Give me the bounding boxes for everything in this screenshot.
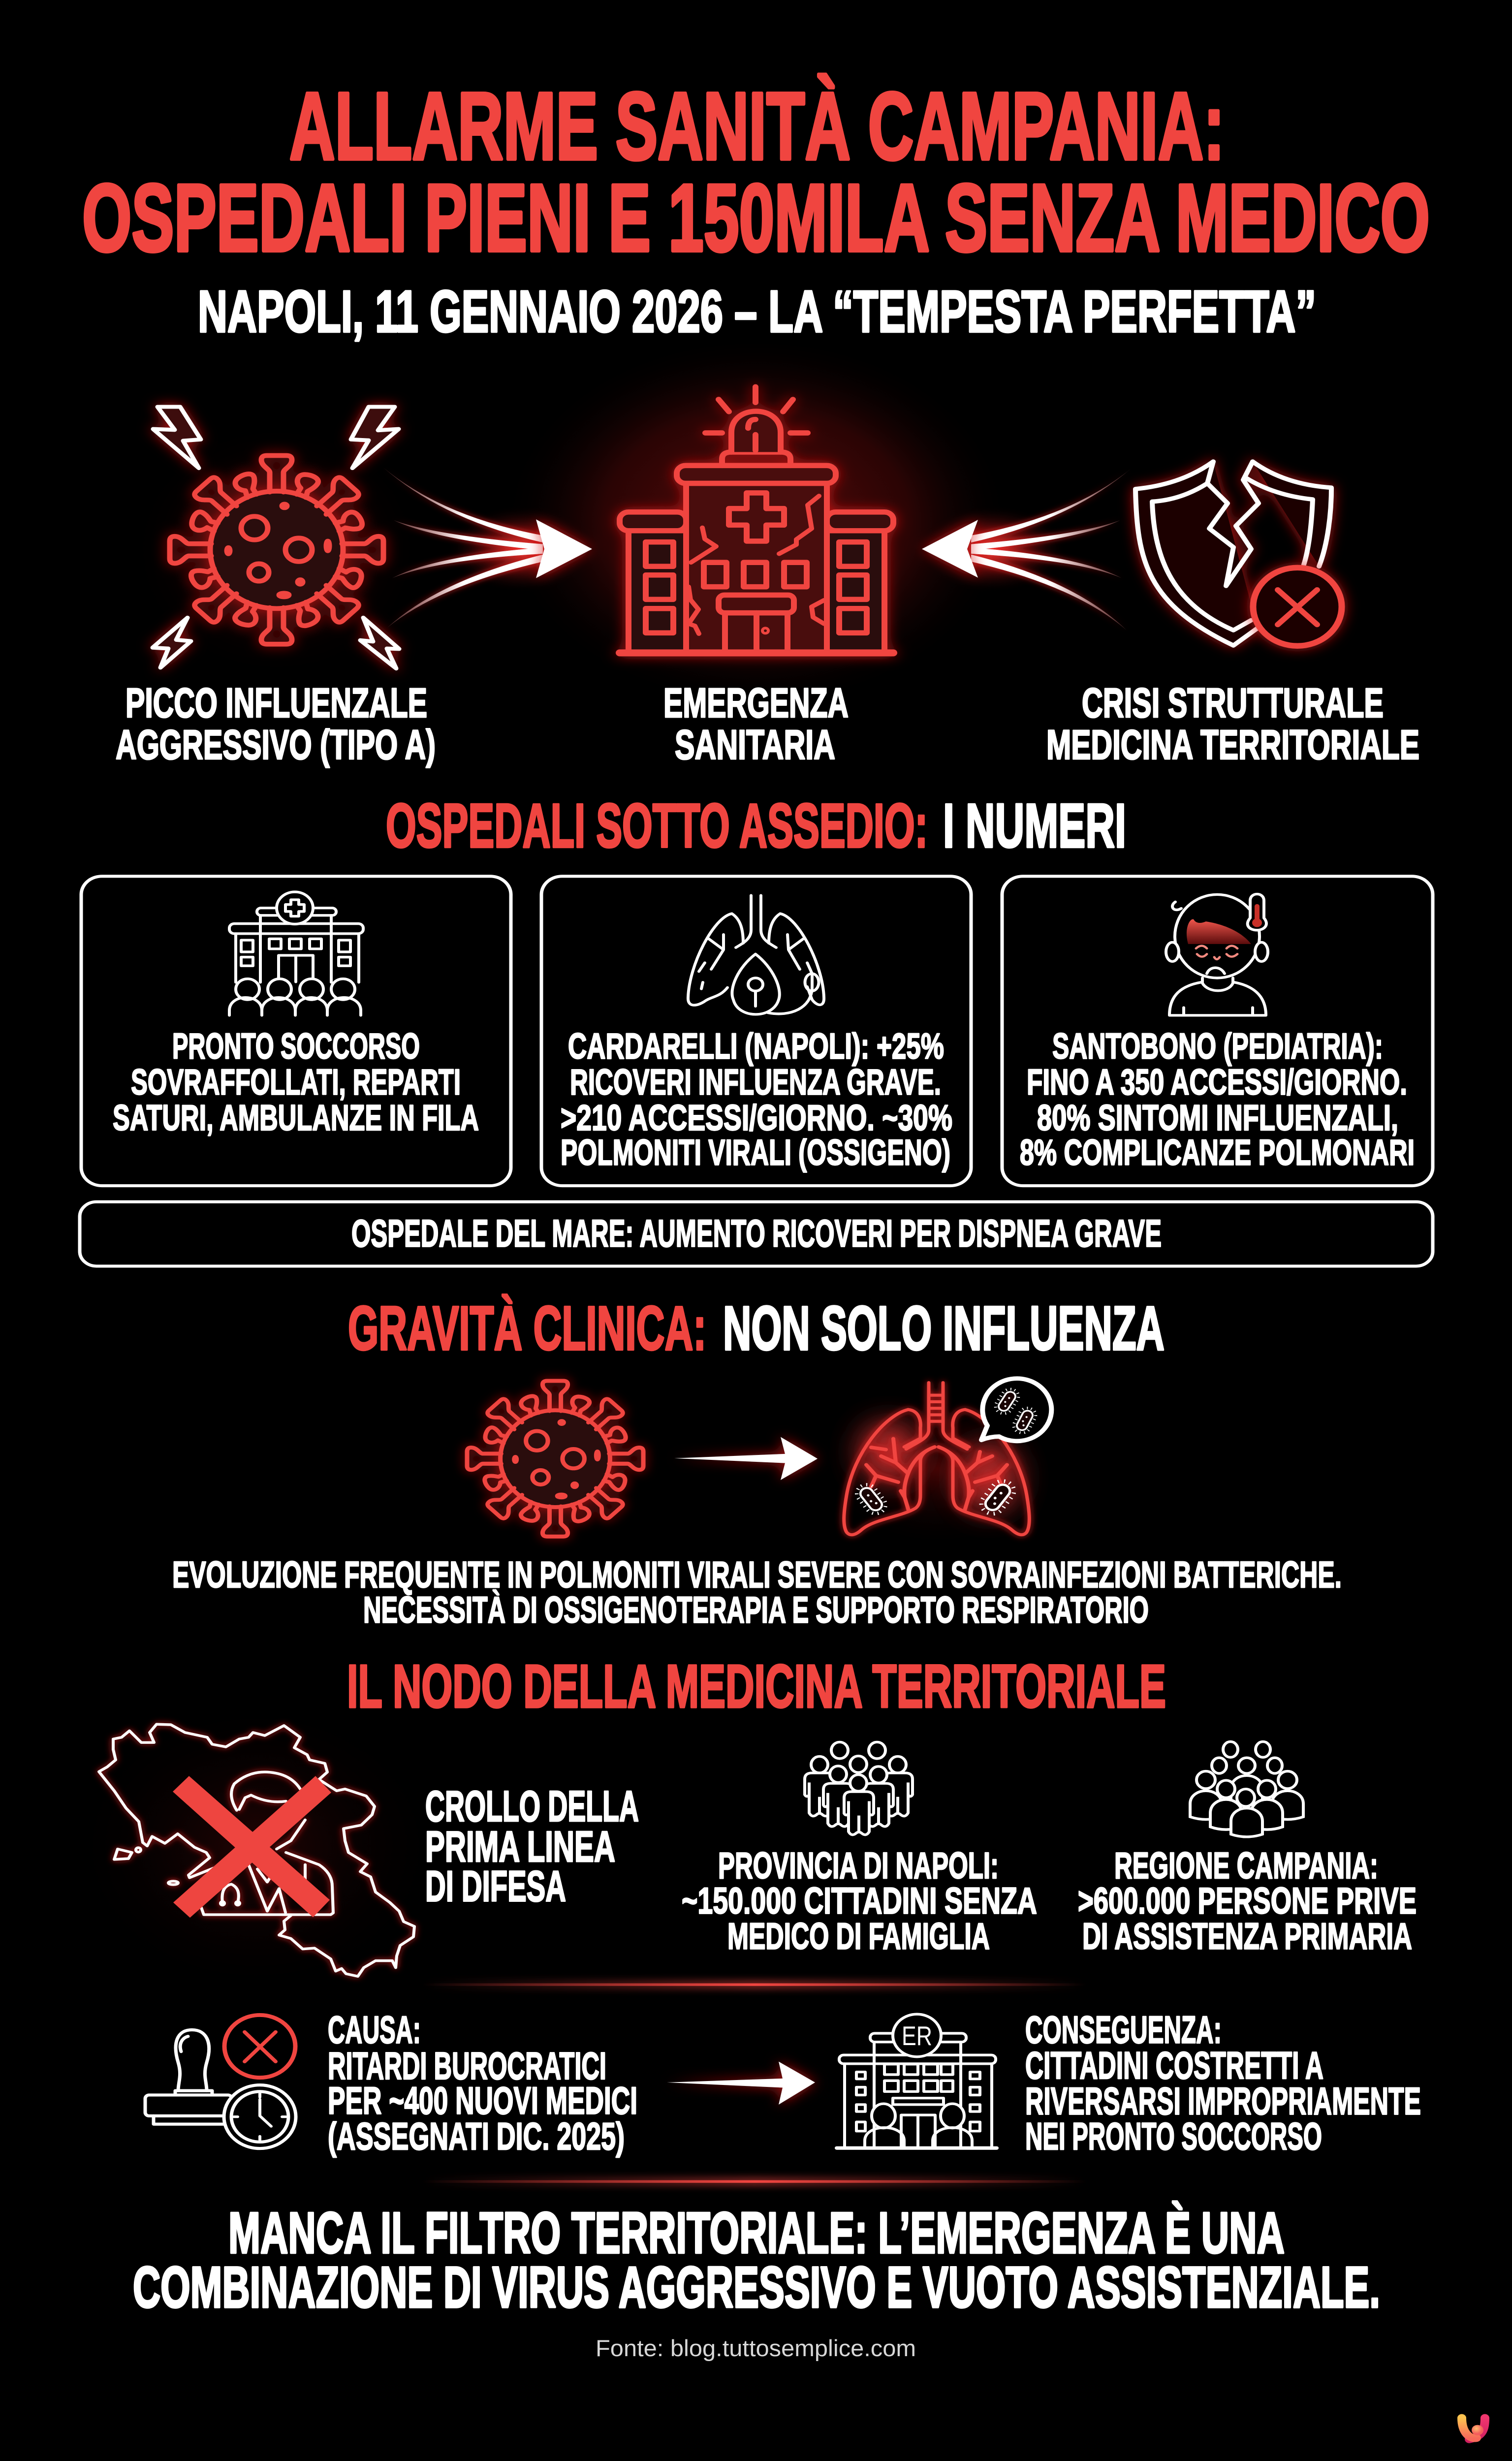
icon: hospital with crowd [229, 892, 363, 1015]
conclusion [133, 2200, 1380, 2320]
icon: ER building with people: ER [902, 2021, 932, 2051]
text: card two: RICOVERI INFLUENZA GRAVE. [570, 1062, 941, 1103]
arrow: virus to lungs [674, 1437, 818, 1480]
panel: pronto soccorso card [81, 876, 511, 1186]
heading: clinical severity: NON SOLO INFLUENZA [723, 1294, 1165, 1363]
text: card one: SOVRAFFOLLATI, REPARTI [131, 1062, 461, 1103]
title [82, 72, 1430, 271]
icon: broken shield with X [1135, 462, 1342, 646]
text: first line collapse [425, 1782, 639, 1910]
arrow: right converging arrow [918, 469, 1131, 630]
text: card two: CARDARELLI (NAPOLI): +25% [568, 1026, 944, 1066]
text: card two [561, 1026, 952, 1173]
icon: standing crowd [805, 1742, 913, 1835]
text: first line collapse: CROLLO DELLA [425, 1782, 639, 1830]
text: cause: CAUSA: [328, 2008, 421, 2051]
labels: health emergency: EMERGENZA [663, 680, 849, 726]
panel: naples province [682, 1742, 1037, 1957]
labels: virus peak: AGGRESSIVO (TIPO A) [116, 722, 436, 768]
icon: damaged hospital with siren [501, 335, 1012, 708]
icon: bacteria speech bubble [981, 1379, 1051, 1441]
text: cause [328, 2008, 637, 2158]
labels: health emergency: SANITARIA [675, 722, 835, 768]
text: card three [1020, 1026, 1415, 1173]
source: Fonte: blog.tuttosemplice.com [596, 2335, 916, 2361]
text: cause: PER ~400 NUOVI MEDICI [328, 2079, 637, 2122]
text: province figures: ~150.000 CITTADINI SENZA [682, 1880, 1037, 1921]
text: card one [113, 1026, 479, 1138]
text: consequence [1025, 2008, 1421, 2158]
icon: campania map with crossed doctor [69, 1700, 443, 1995]
icon: lungs with oxygen mask [688, 895, 824, 1014]
icon: ER building with people [837, 2014, 997, 2148]
labels: virus peak [116, 680, 436, 768]
heading: hospitals under siege: OSPEDALI SOTTO ASSEDIO: [386, 791, 928, 860]
text: province figures: MEDICO DI FAMIGLIA [727, 1915, 990, 1957]
icon: red X [173, 1776, 331, 1918]
text: clinical evolution [172, 1554, 1342, 1630]
icon: bust crowd [1190, 1742, 1303, 1837]
labels: health emergency [663, 680, 849, 768]
heading: hospitals under siege: I NUMERI [943, 791, 1126, 860]
text: card one: PRONTO SOCCORSO [172, 1026, 420, 1066]
icon: virus small [467, 1381, 643, 1537]
icon: logo [1462, 2418, 1485, 2439]
icon: virus with lightning bolts [129, 407, 424, 680]
labels: virus peak: PICCO INFLUENZALE [126, 680, 427, 726]
panel: cardarelli card [541, 876, 971, 1186]
arrow: cause to consequence [667, 2061, 815, 2105]
icon: feverish child with thermometer [1166, 894, 1268, 1015]
heading: clinical severity: GRAVITÀ CLINICA: [348, 1294, 706, 1363]
text: first line collapse: PRIMA LINEA [425, 1823, 615, 1871]
icon: stamp, clock and X [145, 2015, 296, 2148]
panel: perfect storm diagram [116, 335, 1419, 768]
panel: consequence [837, 2008, 1421, 2158]
panel: santobono card [1002, 876, 1433, 1186]
panel: cause [145, 2008, 637, 2158]
text: card two: >210 ACCESSI/GIORNO. ~30% [561, 1098, 952, 1138]
text: card one: SATURI, AMBULANZE IN FILA [113, 1098, 479, 1138]
text: cause: RITARDI BUROCRATICI [328, 2045, 606, 2087]
text: card two: POLMONITI VIRALI (OSSIGENO) [561, 1132, 950, 1173]
panel: ospedale del mare banner [80, 1202, 1433, 1266]
text: province figures [682, 1844, 1037, 1957]
panel: campania region [1078, 1742, 1417, 1957]
text: province figures: PROVINCIA DI NAPOLI: [718, 1844, 999, 1886]
icon: infected lungs [824, 1379, 1051, 1547]
text: region figures [1078, 1844, 1417, 1957]
labels: structural crisis [1046, 680, 1419, 768]
text: consequence: CONSEGUENZA: [1025, 2008, 1222, 2051]
text: cause: (ASSEGNATI DIC. 2025) [328, 2115, 625, 2158]
arrow: left converging arrow [383, 467, 596, 628]
text: first line collapse: DI DIFESA [425, 1862, 566, 1910]
